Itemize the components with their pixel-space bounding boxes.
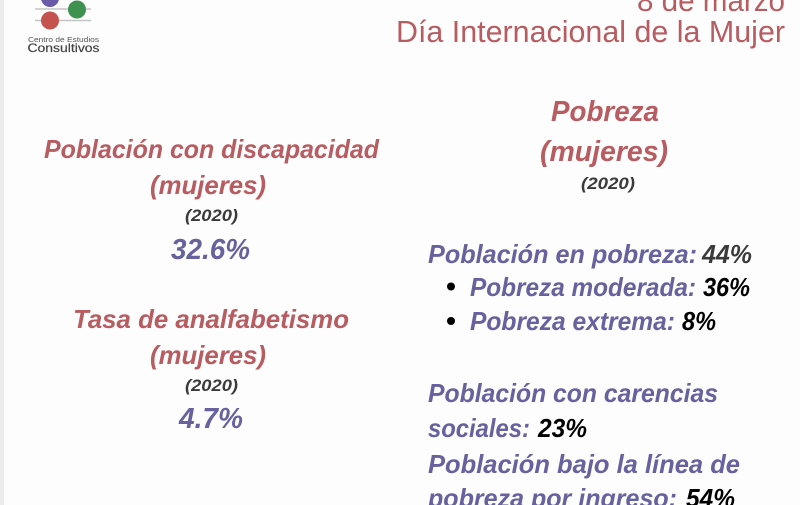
panel: tasa de analfabetismo: (2020)	[185, 376, 238, 395]
panel: población con discapacidad: (mujeres)	[150, 170, 266, 200]
carencias sociales: sociales:	[428, 413, 530, 443]
panel: tasa de analfabetismo	[73, 304, 349, 435]
panel: tasa de analfabetismo: (mujeres)	[150, 340, 266, 370]
pobreza extrema: Pobreza extrema:	[470, 306, 675, 336]
panel: pobreza figures	[427, 239, 752, 505]
panel: pobreza heading: Pobreza	[551, 96, 659, 128]
header date and title: Día Internacional de la Mujer	[396, 14, 785, 49]
logo: Centro de Estudios Consultivos: Centro de Estudios	[28, 35, 99, 44]
panel: población con discapacidad: (2020)	[185, 206, 238, 225]
pobreza moderada: Pobreza moderada:	[470, 272, 696, 302]
línea de pobreza por ingreso: Población bajo la línea de	[428, 449, 740, 479]
carencias sociales: Población con carencias	[428, 378, 718, 408]
panel: tasa de analfabetismo: 4.7%	[178, 403, 243, 435]
panel: pobreza heading: (2020)	[581, 174, 635, 193]
panel: población con discapacidad: Población con discapacidad	[44, 134, 380, 164]
población en pobreza: Población en pobreza:	[428, 239, 697, 269]
panel: población con discapacidad	[44, 134, 380, 266]
panel: tasa de analfabetismo: Tasa de analfabetismo	[73, 304, 349, 334]
pobreza moderada: 36%	[703, 272, 750, 302]
panel: pobreza heading: (mujeres)	[540, 136, 668, 168]
pobreza extrema: 8%	[682, 306, 716, 336]
panel: pobreza heading	[540, 96, 668, 193]
carencias sociales	[428, 378, 718, 443]
panel: población con discapacidad: 32.6%	[171, 234, 250, 266]
línea de pobreza por ingreso	[427, 449, 740, 505]
logo: Centro de Estudios Consultivos	[28, 0, 100, 55]
población en pobreza: 44%	[701, 239, 752, 269]
carencias sociales: 23%	[537, 413, 587, 443]
logo: Centro de Estudios Consultivos: Consultivos	[28, 41, 100, 55]
